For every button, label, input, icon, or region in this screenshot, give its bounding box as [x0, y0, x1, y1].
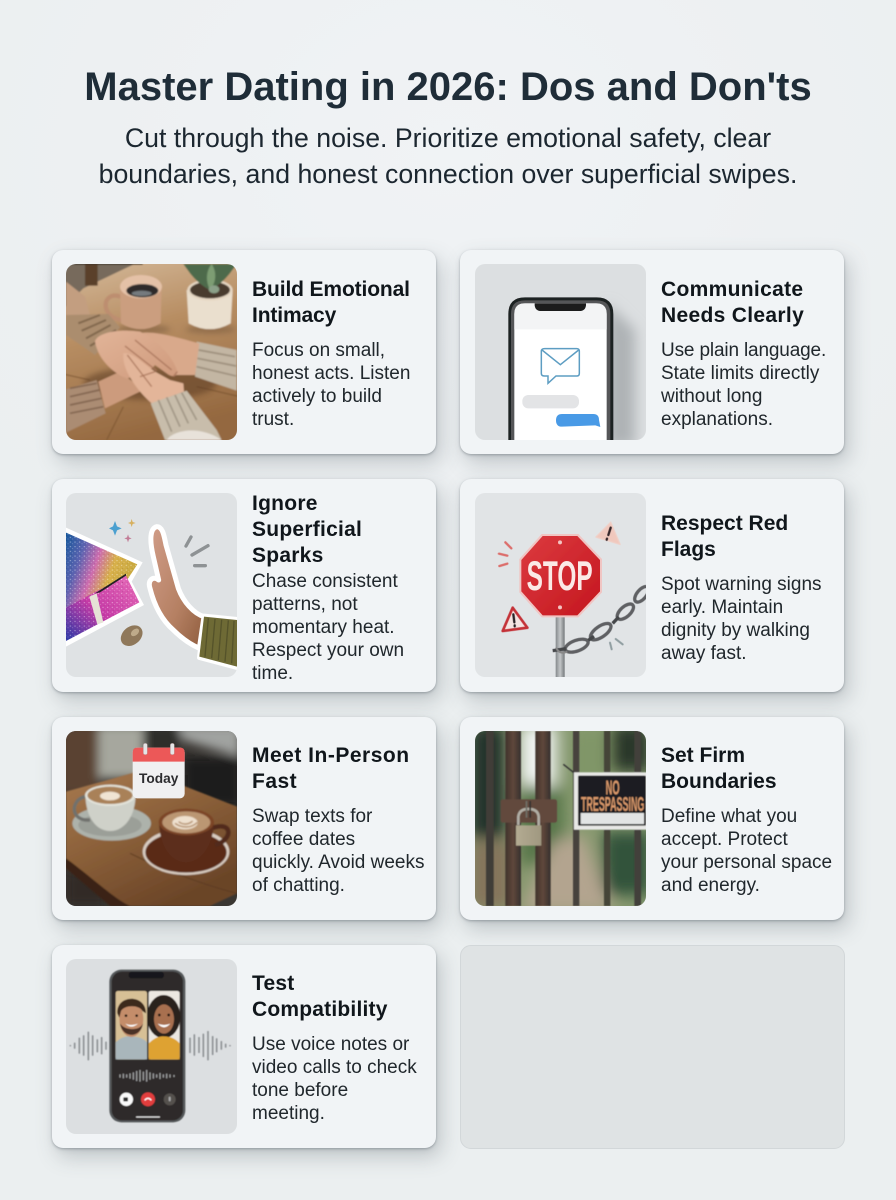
panel: ignore superficial sparks — [52, 479, 436, 692]
heading — [661, 278, 804, 327]
panel: set firm boundaries — [460, 717, 844, 920]
panel: test compatibility — [52, 945, 436, 1148]
heading: Superficial — [252, 518, 362, 541]
body text: quickly. Avoid weeks — [252, 852, 424, 873]
image: locked gate with sign — [475, 731, 646, 906]
body text: patterns, not — [252, 594, 358, 615]
body text — [252, 1034, 417, 1124]
image: locked gate with sign: NO — [606, 777, 620, 800]
body text: accept. Protect — [661, 829, 788, 850]
body text: Respect your own — [252, 640, 404, 661]
body text — [252, 806, 424, 896]
body text: Spot warning signs — [661, 574, 822, 595]
body text: away fast. — [661, 643, 747, 664]
body text: Chase consistent — [252, 571, 398, 592]
body text: State limits directly — [661, 363, 819, 384]
body text: dignity by walking — [661, 620, 810, 641]
body text: Use plain language. — [661, 340, 826, 361]
heading: Boundaries — [661, 770, 777, 793]
body text: Focus on small, — [252, 340, 385, 361]
subtitle — [99, 123, 797, 189]
body text: early. Maintain — [661, 597, 783, 618]
body text — [661, 574, 822, 664]
heading: Fast — [252, 770, 297, 793]
body text — [661, 340, 826, 430]
heading: Flags — [661, 538, 716, 561]
heading: Respect Red — [661, 512, 788, 535]
heading: Needs Clearly — [661, 304, 804, 327]
image: hand rejecting glitter — [66, 493, 237, 677]
subtitle: boundaries, and honest connection over superficial swipes. — [99, 159, 797, 189]
panel: respect red flags — [460, 479, 844, 692]
body text: and energy. — [661, 875, 760, 896]
heading — [661, 512, 788, 561]
body text: honest acts. Listen — [252, 363, 410, 384]
heading — [252, 492, 362, 567]
body text: time. — [252, 663, 293, 684]
heading — [252, 972, 388, 1021]
image: holding hands over coffee — [66, 264, 237, 440]
image: stop sign and chain: STOP — [527, 553, 593, 599]
body text: explanations. — [661, 409, 773, 430]
title: Master Dating in 2026: Dos and Don'ts — [84, 65, 812, 109]
heading — [252, 278, 410, 327]
body text: of chatting. — [252, 875, 345, 896]
panel: meet in-person fast — [52, 717, 436, 920]
body text: video calls to check — [252, 1057, 417, 1078]
heading: Test — [252, 972, 294, 995]
body text: without long — [661, 386, 762, 407]
body text: Swap texts for — [252, 806, 372, 827]
heading: Communicate — [661, 278, 803, 301]
image: stop sign and chain — [475, 493, 646, 677]
heading: Ignore — [252, 492, 318, 515]
body text — [661, 806, 832, 896]
body text: meeting. — [252, 1103, 325, 1124]
heading: Compatibility — [252, 998, 388, 1021]
panel: empty placeholder — [460, 945, 845, 1149]
panel: communicate needs clearly — [460, 250, 844, 454]
image: phone with message icon — [475, 264, 646, 440]
body text — [252, 571, 404, 684]
body text: tone before — [252, 1080, 348, 1101]
heading: Intimacy — [252, 304, 336, 327]
body text: Define what you — [661, 806, 797, 827]
body text: momentary heat. — [252, 617, 395, 638]
body text: trust. — [252, 409, 294, 430]
body text: actively to build — [252, 386, 382, 407]
image: video call on phone — [66, 959, 237, 1134]
body text — [252, 340, 410, 430]
image: coffee cups with calendar — [66, 731, 237, 906]
heading: Meet In-Person — [252, 744, 410, 767]
body text: your personal space — [661, 852, 832, 873]
heading: Set Firm — [661, 744, 745, 767]
heading: Build Emotional — [252, 278, 410, 301]
subtitle: Cut through the noise. Prioritize emotional safety, clear — [125, 123, 771, 153]
body text: Use voice notes or — [252, 1034, 409, 1055]
panel: build emotional intimacy — [52, 250, 436, 454]
heading — [661, 744, 777, 793]
heading — [252, 744, 410, 793]
body text: coffee dates — [252, 829, 355, 850]
image: coffee cups with calendar: Today — [139, 770, 179, 786]
heading: Sparks — [252, 544, 324, 567]
